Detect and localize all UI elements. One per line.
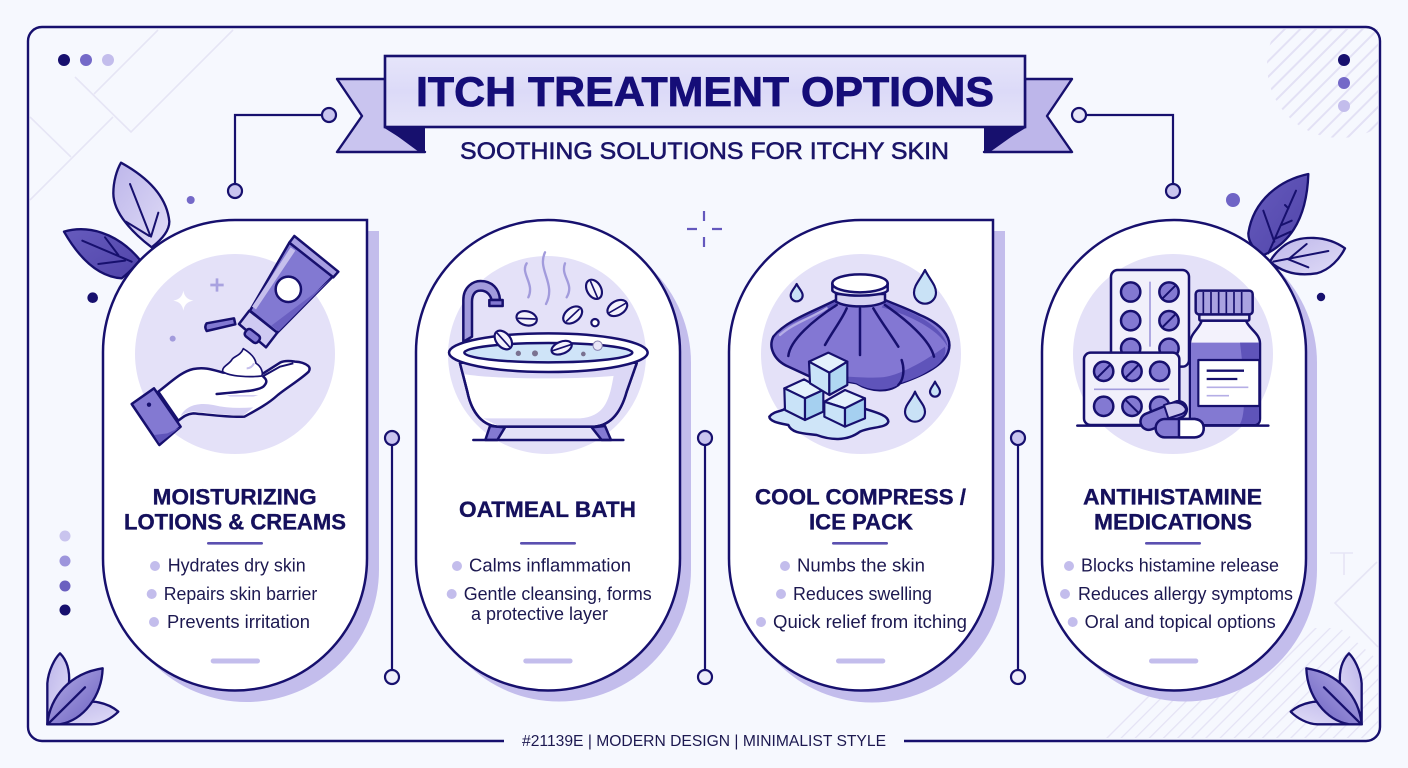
card 1 bullet list: Hydrates dry skin	[168, 556, 306, 576]
card 2 divider	[520, 542, 576, 545]
leaves top right	[1248, 174, 1345, 274]
card 3 bullet list: Quick relief from itching	[773, 612, 967, 632]
hatch corner top right	[1262, 29, 1378, 141]
card 4 title	[1083, 484, 1262, 534]
panel: oatmeal bath	[416, 220, 691, 702]
vertical connector 3	[1011, 431, 1025, 684]
leaves top left	[64, 163, 169, 278]
dots top right	[1338, 54, 1350, 112]
ribbon main panel	[385, 56, 1025, 127]
title ribbon	[337, 56, 1072, 152]
panel: antihistamine medications	[1042, 220, 1317, 702]
footer caption: #21139E | MODERN DESIGN | MINIMALIST STYLE	[522, 733, 886, 750]
card 1 title: LOTIONS & CREAMS	[124, 509, 346, 534]
card 3 shadow	[739, 231, 1005, 702]
card 2 backdrop circle	[448, 256, 646, 454]
card 1 title: MOISTURIZING	[153, 484, 317, 509]
card 4 bullet list: Reduces allergy symptoms	[1078, 584, 1293, 604]
card 3 pill	[836, 658, 885, 664]
vertical connector 1	[385, 431, 399, 684]
card 4 backdrop circle	[1073, 254, 1273, 454]
card 2 bullet list: a protective layer	[471, 604, 608, 624]
card 4 bullet list	[1060, 556, 1293, 632]
card 2 bullet list: Calms inflammation	[469, 556, 631, 576]
icon: bathtub with oats	[449, 252, 648, 440]
card 3 title	[755, 484, 967, 534]
hatch corner bottom right	[1103, 628, 1378, 738]
connector left	[228, 108, 336, 198]
small dots near leaves	[87, 193, 1325, 303]
leaves bottom left	[47, 653, 118, 724]
icon: pills and bottle	[1077, 270, 1268, 437]
title: ITCH TREATMENT OPTIONS	[416, 68, 994, 115]
card 1 body	[103, 220, 367, 690]
card 1 bullet list: Repairs skin barrier	[164, 584, 317, 604]
sparkle cross	[687, 211, 722, 247]
card 2 body	[416, 220, 680, 690]
card 2 bullet list	[447, 556, 652, 624]
card 2 title: OATMEAL BATH	[459, 497, 636, 522]
icon: lotion tube and hand	[132, 236, 338, 445]
ribbon right tail	[984, 79, 1072, 152]
subtitle: SOOTHING SOLUTIONS FOR ITCHY SKIN	[460, 138, 949, 165]
panel: moisturizing lotions and creams	[103, 220, 379, 702]
card 2 bullet list: Gentle cleansing, forms	[464, 584, 652, 604]
ribbon left tail	[337, 79, 425, 152]
dots top left	[58, 54, 114, 66]
card 4 pill	[1149, 658, 1198, 664]
card 3 bullet list	[756, 556, 967, 632]
card 3 body	[729, 220, 993, 690]
card 1 pill	[211, 658, 260, 664]
leaves bottom right	[1291, 653, 1362, 724]
icon: ice pack and cubes	[769, 270, 949, 439]
panel: cool compress ice pack	[729, 220, 1005, 702]
card 4 title: MEDICATIONS	[1094, 509, 1252, 534]
ribbon right fold	[984, 127, 1025, 152]
card 1 bullet list	[147, 556, 317, 632]
card 1 divider	[207, 542, 263, 545]
connector right	[1072, 108, 1180, 198]
card 3 divider	[832, 542, 888, 545]
card 1 backdrop circle	[135, 254, 335, 454]
card 1 title	[124, 484, 346, 534]
dots left column	[60, 530, 70, 616]
card 4 bullet list: Blocks histamine release	[1081, 556, 1279, 576]
card 3 bullet list: Reduces swelling	[793, 584, 932, 604]
card 2 shadow	[427, 231, 691, 702]
card 4 body	[1042, 220, 1306, 690]
card 1 bullet list: Prevents irritation	[167, 612, 310, 632]
card 2 pill	[523, 658, 573, 664]
card 1 shadow	[114, 231, 379, 702]
card 3 bullet list: Numbs the skin	[797, 556, 925, 576]
card 3 backdrop circle	[761, 254, 961, 454]
card 3 title: ICE PACK	[809, 509, 914, 534]
card 3 title: COOL COMPRESS /	[755, 484, 967, 509]
ribbon left fold	[385, 127, 425, 152]
background geometric lines	[30, 30, 1378, 647]
card 4 bullet list: Oral and topical options	[1085, 612, 1276, 632]
card 4 title: ANTIHISTAMINE	[1083, 484, 1262, 509]
vertical connector 2	[698, 431, 712, 684]
card 4 divider	[1145, 542, 1201, 545]
card 4 shadow	[1053, 231, 1317, 702]
